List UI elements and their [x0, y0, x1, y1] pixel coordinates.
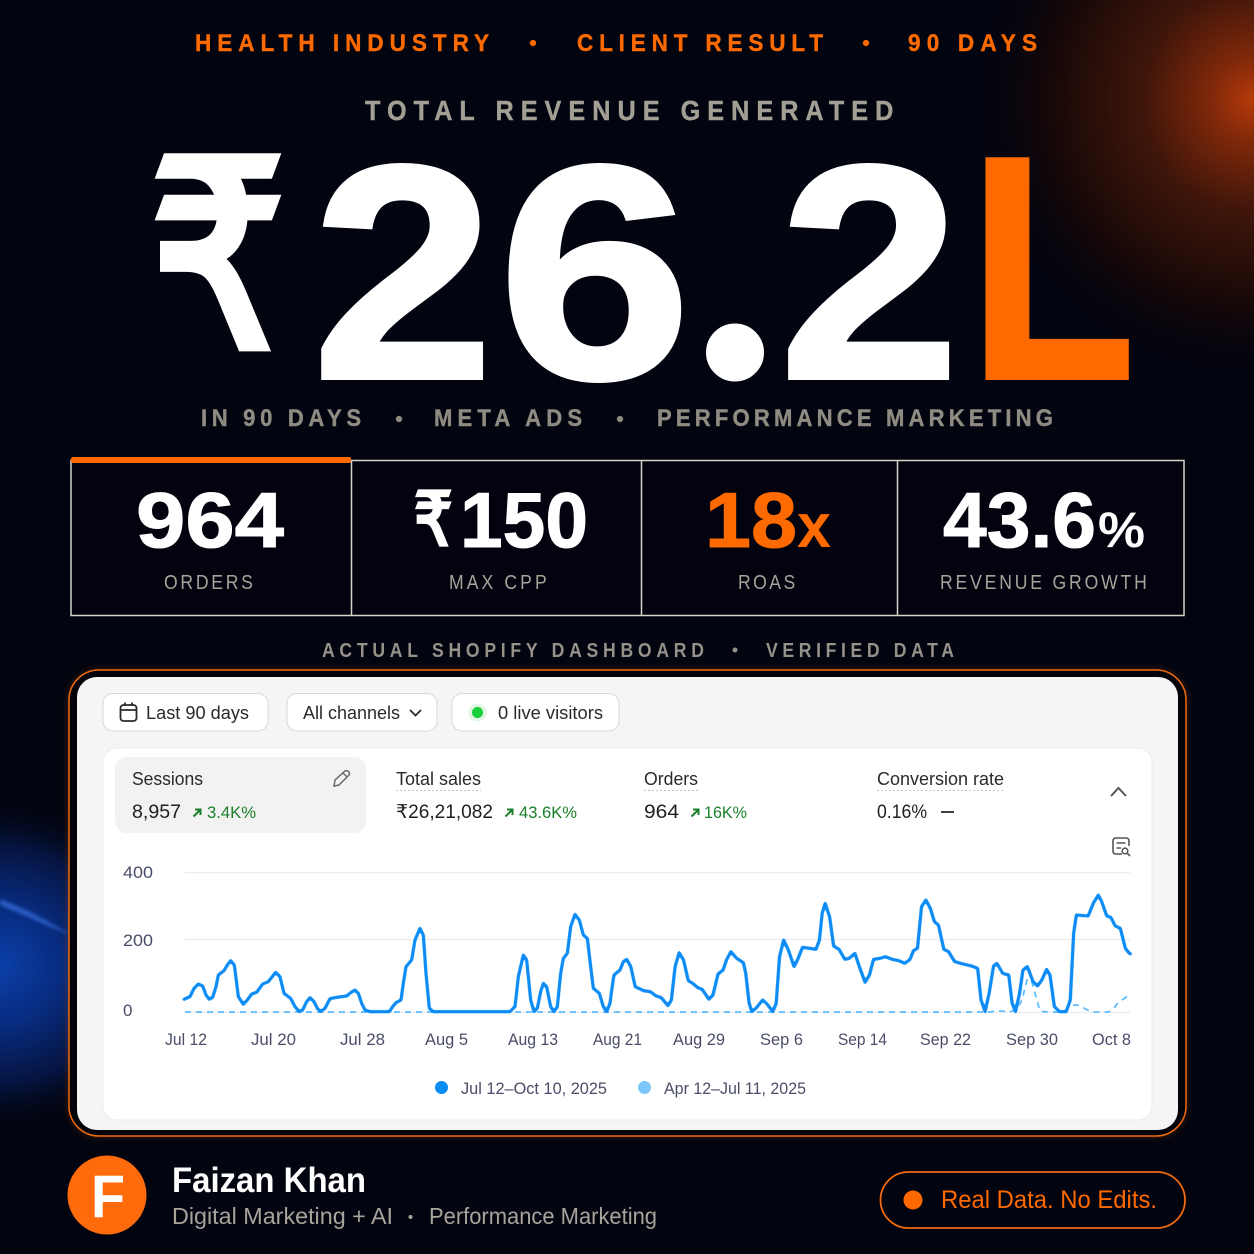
chart legend [435, 1079, 806, 1098]
stat: revenue growth: 43.6 [943, 476, 1096, 564]
stat: revenue growth: REVENUE GROWTH [940, 571, 1147, 593]
metric: conversion rate: Conversion rate [877, 769, 1004, 789]
stat: revenue growth [940, 476, 1147, 593]
x axis labels: Sep 14 [838, 1030, 887, 1049]
comparison series [185, 979, 1130, 1012]
analytics card [103, 748, 1152, 1120]
badge: real data [880, 1172, 1185, 1228]
author name: Faizan Khan [172, 1161, 366, 1200]
avatar: F [91, 1163, 125, 1230]
verified caption: ACTUAL SHOPIFY DASHBOARD [322, 639, 704, 661]
author block [68, 1156, 657, 1234]
metric: sessions: Sessions [132, 769, 203, 789]
stats row [71, 457, 1184, 616]
metric: sessions [115, 757, 366, 833]
metric: total sales: ₹26,21,082 [396, 802, 493, 823]
headline figure: L [970, 92, 1134, 444]
subheading: META ADS [434, 404, 582, 431]
filter: last 90 days [103, 694, 268, 731]
x axis labels: Aug 5 [425, 1030, 468, 1049]
headline figure: ₹ [150, 48, 286, 421]
y axis labels: 400 [123, 863, 153, 882]
filter: all channels: All channels [303, 703, 400, 723]
headline figure: . [707, 186, 763, 409]
metric: sessions: 8,957 [132, 802, 181, 823]
stat: revenue growth: % [1098, 502, 1145, 558]
heading: total revenue generated: TOTAL REVENUE GENERATED [365, 95, 893, 126]
avatar [68, 1156, 146, 1234]
x axis labels: Jul 28 [340, 1030, 385, 1049]
stat: max cpp [414, 461, 588, 593]
subheading: PERFORMANCE MARKETING [657, 404, 1053, 431]
metric: orders: 16K% [704, 803, 747, 822]
x axis labels: Sep 30 [1006, 1030, 1058, 1049]
icon: collapse chevron [1111, 788, 1126, 796]
subheading: IN 90 DAYS [201, 404, 361, 431]
chart legend: Apr 12–Jul 11, 2025 [664, 1079, 806, 1098]
stat: roas: x [797, 492, 832, 561]
headline figure: 2 [312, 102, 494, 443]
y axis labels [123, 863, 153, 1020]
metric: total sales: Total sales [396, 769, 481, 789]
metric: orders [644, 769, 747, 823]
filter: all channels [287, 694, 437, 731]
metric: conversion rate: 0.16% [877, 802, 927, 823]
author role: Digital Marketing + AI [172, 1203, 393, 1229]
metric: orders: Orders [644, 769, 698, 789]
stat: max cpp: 150 [460, 476, 588, 564]
y axis labels: 0 [123, 1001, 132, 1020]
x axis labels: Aug 29 [673, 1030, 725, 1049]
x axis labels: Aug 21 [593, 1030, 642, 1049]
headline figure: 6 [498, 102, 692, 443]
subheading [201, 404, 1053, 431]
y axis labels: 200 [123, 931, 153, 950]
verified caption: VERIFIED DATA [766, 639, 954, 661]
top tagline: 90 DAYS [908, 29, 1037, 56]
metric: total sales: 43.6K% [519, 803, 577, 822]
filter: live visitors [452, 694, 619, 731]
chart legend: Jul 12–Oct 10, 2025 [461, 1079, 607, 1098]
icon: report search [1113, 838, 1130, 856]
stat: max cpp: ₹ [414, 461, 453, 567]
top tagline: CLIENT RESULT [577, 29, 824, 56]
stat: orders [136, 476, 284, 593]
verified caption [322, 639, 954, 661]
line chart [123, 863, 1131, 1049]
x axis labels: Aug 13 [508, 1030, 558, 1049]
headline figure [150, 48, 1134, 444]
x axis labels: Oct 8 [1092, 1030, 1131, 1049]
stat: max cpp: MAX CPP [449, 571, 547, 593]
metric: conversion rate [877, 769, 1004, 823]
filter: live visitors: 0 live visitors [498, 703, 603, 723]
metric: orders: 964 [644, 802, 679, 823]
x axis labels: Sep 6 [760, 1030, 803, 1049]
badge: real data: Real Data. No Edits. [941, 1186, 1157, 1214]
filter: last 90 days: Last 90 days [146, 703, 249, 723]
metric: total sales [396, 769, 577, 823]
stat: orders: ORDERS [164, 571, 253, 593]
author role: Performance Marketing [429, 1203, 657, 1229]
headline figure: 2 [779, 102, 960, 443]
stat: roas: ROAS [738, 571, 795, 593]
top tagline: HEALTH INDUSTRY [195, 29, 489, 56]
stat: roas [705, 476, 832, 593]
dashboard frame [69, 670, 1186, 1136]
metric: sessions: 3.4K% [207, 803, 256, 822]
x axis labels: Jul 20 [251, 1030, 296, 1049]
stat: roas: 18 [705, 476, 797, 564]
current series [184, 895, 1130, 1012]
x axis labels: Jul 12 [165, 1030, 207, 1049]
x axis labels: Sep 22 [920, 1030, 971, 1049]
x axis labels [165, 1030, 1131, 1049]
author role [172, 1203, 657, 1229]
stat: orders: 964 [136, 476, 284, 564]
top tagline [195, 29, 1037, 56]
